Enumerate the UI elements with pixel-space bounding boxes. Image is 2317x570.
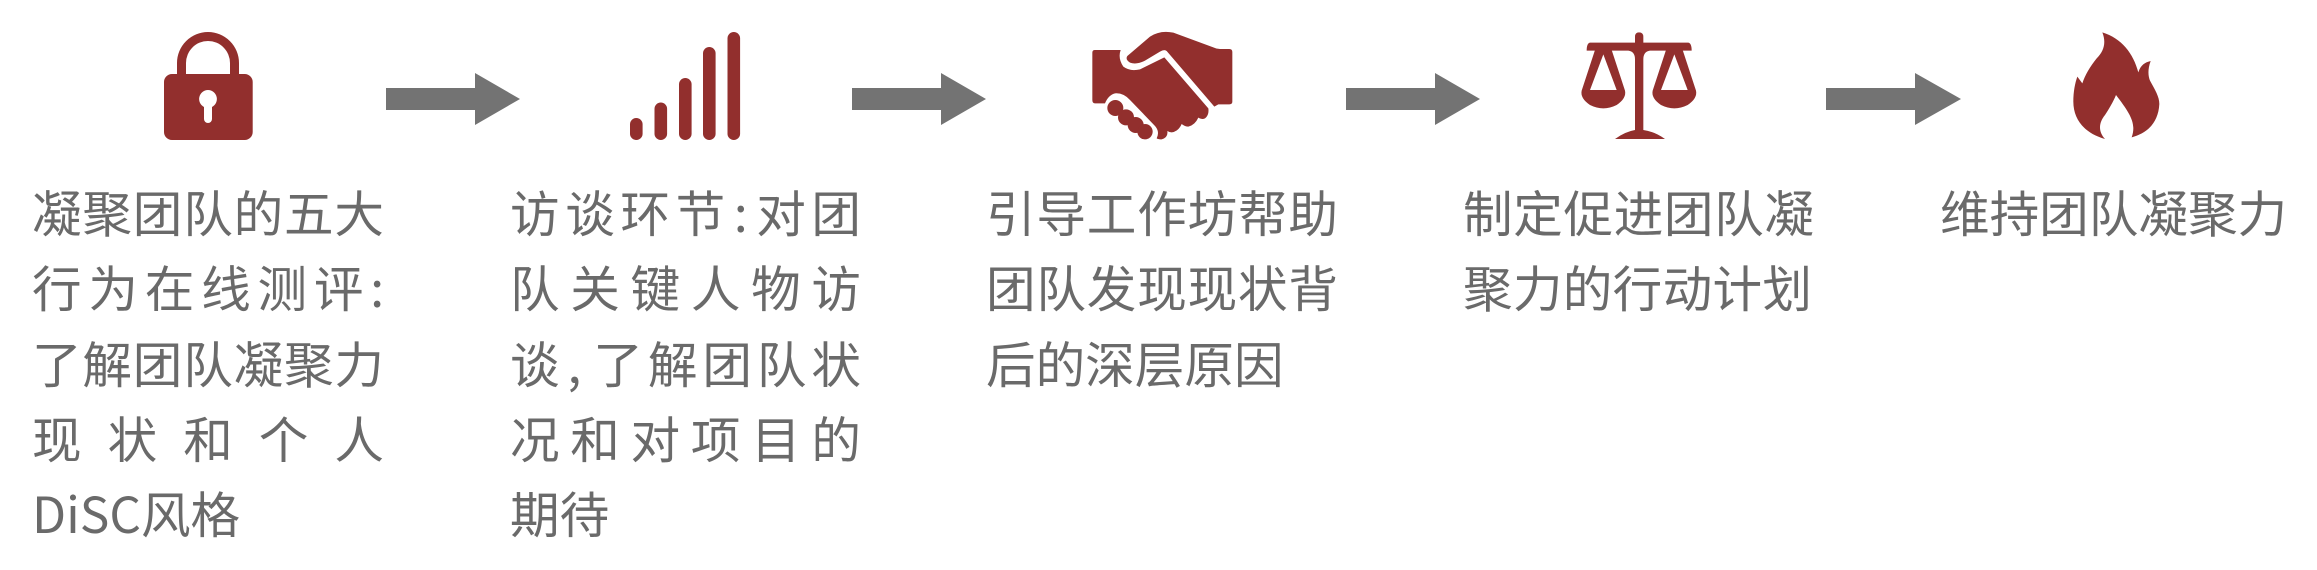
arrow 3	[1346, 73, 1480, 125]
arrow 1	[386, 73, 520, 125]
icon: handshake	[1092, 32, 1232, 140]
text: step 2 description: 访谈环节:对团	[510, 175, 861, 247]
text: step 1 description: 凝聚团队的五大	[32, 175, 384, 247]
text: step 1 description: 行为在线测评:	[32, 250, 384, 322]
arrow 4	[1826, 73, 1961, 125]
text: step 2 description: 期待	[510, 476, 609, 548]
text: step 1 description: 现状和个人	[32, 401, 384, 473]
icon: flame	[2073, 32, 2160, 139]
text: step 2 description: 队关键人物访	[510, 250, 861, 322]
step 5: sustain cohesion	[1940, 32, 2287, 247]
step 3: workshop	[986, 32, 1338, 398]
text: step 3 description: 后的深层原因	[986, 326, 1284, 398]
arrow 2	[852, 73, 986, 125]
text: step 1 description: 了解团队凝聚力	[32, 326, 384, 398]
text: step 4 description: 聚力的行动计划	[1463, 250, 1812, 322]
text: step 4 description: 制定促进团队凝	[1463, 175, 1814, 247]
text: step 3 description	[986, 175, 1338, 398]
icon: signal bars	[630, 32, 740, 140]
step 2: interviews	[510, 32, 861, 548]
icon: balance scale	[1581, 32, 1696, 139]
icon: padlock	[164, 32, 253, 140]
text: step 3 description: 引导工作坊帮助	[986, 175, 1338, 247]
text: step 1 description: DiSC风格	[32, 476, 240, 548]
text: step 5 description: 维持团队凝聚力	[1940, 175, 2287, 247]
step 4: action plan	[1463, 32, 1814, 322]
text: step 2 description: 况和对项目的	[510, 401, 861, 473]
text: step 4 description	[1463, 175, 1814, 322]
text: step 2 description: 谈,了解团队状	[510, 326, 861, 398]
text: step 3 description: 团队发现现状背	[986, 250, 1338, 322]
text: step 1 description	[32, 175, 384, 548]
step 1: online assessment	[32, 32, 384, 548]
text: step 2 description	[510, 175, 861, 548]
